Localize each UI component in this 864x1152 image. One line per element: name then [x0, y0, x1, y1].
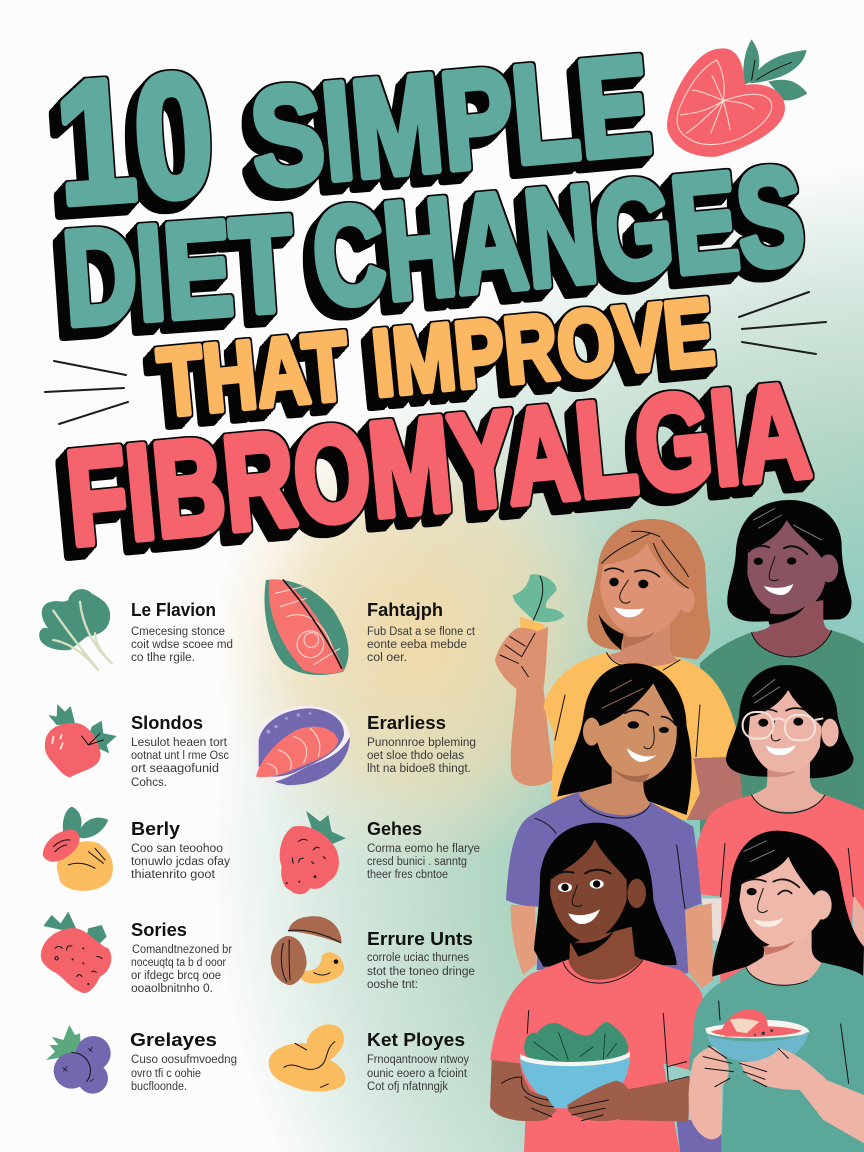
text block: coit wdse scoee md	[131, 639, 233, 651]
person: right middle, glasses	[726, 665, 853, 812]
icon: heart fruit	[667, 39, 807, 157]
icon: apple	[45, 704, 117, 777]
text block	[131, 737, 229, 789]
heading: Errure Unts	[367, 928, 473, 949]
title	[50, 28, 815, 574]
heading: Slondos	[131, 712, 203, 733]
title line: THAT IMPROVE	[154, 279, 718, 437]
text block: Comandtnezoned br	[132, 944, 232, 956]
text block: Punonnroe bpleming	[367, 737, 476, 749]
person: bottom right, teal shirt	[688, 831, 864, 1152]
people group	[490, 500, 864, 1152]
title line: DIET CHANGES	[59, 138, 810, 354]
arms and hands	[689, 1047, 729, 1139]
greens bowl	[524, 1022, 628, 1065]
text block: Lesulot heaen tort	[131, 737, 228, 749]
text block: ovro tfi c oohie	[131, 1068, 201, 1080]
text block: ooshe tnt:	[367, 979, 418, 991]
person: middle left, purple shirt	[506, 792, 722, 1152]
heading: Le Flavion	[131, 599, 216, 620]
text block: Cot ofj nfatnngjk	[367, 1081, 448, 1093]
text block: Frnoqantnoow ntwoy	[367, 1054, 469, 1066]
text block: Fub Dsat a se flone ct	[367, 626, 476, 638]
icon: blueberries	[46, 1025, 111, 1094]
icon: berry	[41, 912, 111, 993]
text block	[367, 843, 480, 881]
text block: bucfloonde.	[131, 1081, 187, 1093]
text block	[367, 1054, 469, 1093]
panel: food list	[39, 579, 480, 1094]
text block: ootnat unt l rme Osc	[131, 750, 229, 762]
icon: peach and fruit	[43, 807, 113, 891]
item: Slondos	[45, 704, 229, 789]
text block: ounic eoero a fcioint	[367, 1068, 468, 1080]
icon: nuts	[271, 916, 344, 985]
text block: co tlhe rgile.	[131, 652, 195, 664]
text block: cresd bunici . sanntg	[367, 856, 467, 868]
hand	[495, 627, 548, 692]
title line: 10 SIMPLE: SIMPLE	[245, 28, 656, 216]
person: top left, yellow shirt	[495, 519, 745, 820]
text block: col oer.	[367, 652, 407, 664]
text block: Corma eomo he flarye	[367, 843, 480, 855]
title line: 10 SIMPLE: 10	[50, 36, 219, 241]
text block: oet sloe thdo oelas	[367, 750, 464, 762]
text block: stot the toneo dringe	[367, 966, 475, 978]
item: Le Flavion	[39, 589, 233, 670]
item: Errure Unts	[271, 916, 475, 991]
text block: or ifdegc brcq ooe	[131, 970, 221, 982]
icon: salmon bowl	[255, 706, 350, 785]
heading: Ket Ployes	[367, 1029, 465, 1050]
heading: Sories	[131, 919, 187, 940]
person: right middle, coral shirt	[692, 795, 864, 1000]
item: Sories	[41, 912, 232, 995]
heading: Berly	[131, 818, 181, 839]
person: middle left, head	[557, 663, 692, 815]
item: Ket Ployes	[269, 1024, 469, 1093]
burst lines: right	[739, 292, 826, 354]
heading: Gehes	[367, 818, 422, 839]
title line: THAT IMPROVE: IMPROVE	[368, 279, 718, 416]
text block: eonte eeba mebde	[367, 639, 467, 651]
text block: ooaolbnitnho 0.	[131, 983, 213, 995]
icon: raspberry	[280, 811, 346, 894]
text block: corrole uciac thurnes	[367, 952, 469, 964]
text block: Cohcs.	[131, 777, 167, 789]
item: Erarliess	[255, 706, 476, 785]
text block	[367, 626, 476, 664]
item: Grelayes	[46, 1025, 237, 1094]
text block	[131, 944, 232, 995]
person: top right, green shirt	[700, 500, 864, 833]
text block: Cuso oosufmvoedng	[131, 1054, 237, 1066]
item: Gehes	[280, 811, 480, 894]
held leaf	[520, 617, 545, 660]
text block	[131, 1054, 237, 1093]
title line: 10 SIMPLE	[50, 28, 656, 241]
heading: Erarliess	[367, 712, 446, 733]
soup bowl	[705, 1020, 809, 1038]
text block	[131, 843, 230, 881]
text block: theer fres cbntoe	[367, 869, 448, 881]
text block	[367, 952, 475, 991]
text block: lht na bidoe8 thingt.	[367, 763, 471, 775]
title line: THAT IMPROVE: THAT	[154, 313, 353, 437]
item: Fahtajph	[264, 579, 476, 675]
heading: Fahtajph	[367, 599, 443, 620]
text block: Cmecesing stonce	[131, 626, 225, 638]
burst lines: left	[45, 361, 128, 424]
text block: thiatenrito goot	[131, 869, 216, 881]
text block: ort seaagofunid	[131, 763, 219, 775]
icon: salmon leaf	[264, 579, 349, 675]
person: bottom left, coral shirt	[490, 823, 703, 1152]
text block	[131, 626, 233, 664]
text block: tonuwlo jcdas ofay	[131, 856, 230, 868]
title line: DIET CHANGES: DIET	[59, 189, 298, 354]
icon: leafy greens	[39, 589, 112, 670]
icon: ginger	[269, 1024, 345, 1091]
text block	[367, 737, 476, 775]
text block: noceuqtq ta b d ooor	[131, 957, 226, 969]
heading: Grelayes	[130, 1029, 217, 1050]
item: Berly	[43, 807, 230, 891]
text block: Coo san teoohoo	[131, 843, 223, 855]
